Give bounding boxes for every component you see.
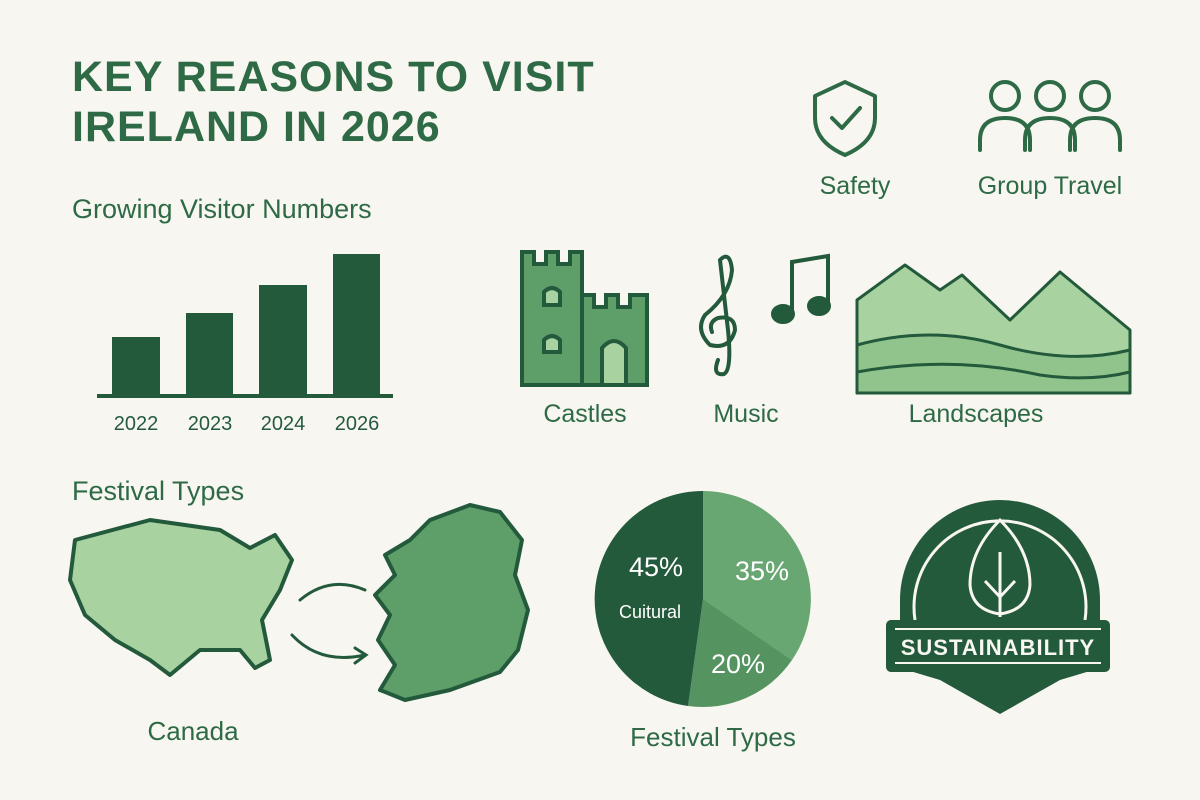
arrows [292,584,366,663]
bar chart [97,254,393,435]
pie chart: 20% [711,649,765,679]
pie chart: Cuitural [619,602,681,622]
title: KEY REASONS TO VISIT [72,53,595,101]
icon: music notes [701,256,829,374]
icon: group travel [980,82,1120,150]
icon: castle [522,252,647,385]
badge: sustainability [886,500,1110,714]
heading: festival types: Festival Types [72,476,244,506]
icon: landscapes [857,265,1130,393]
label: castles: Castles [543,400,627,428]
icon: safety shield [815,82,875,155]
label: festival types: Festival Types [630,722,796,752]
heading: growing visitor numbers: Growing Visitor Numbers [72,194,372,224]
bar chart: 2023 [188,413,232,435]
label: canada: Canada [147,716,239,746]
bar chart: 2024 [261,413,305,435]
map: usa [70,520,292,675]
map: ireland [375,505,528,700]
pie chart: 45% [629,552,683,582]
title [72,53,595,151]
bar chart: 2022 [114,413,158,435]
title: IRELAND IN 2026 [72,103,441,151]
bar chart: 2026 [335,413,379,435]
pie chart [595,491,811,707]
pie chart: 35% [735,556,789,586]
badge: sustainability: SUSTAINABILITY [901,635,1095,660]
label: landscapes: Landscapes [909,400,1043,428]
label: music: Music [713,400,779,428]
label: group travel: Group Travel [978,172,1122,200]
label: safety: Safety [820,172,891,200]
